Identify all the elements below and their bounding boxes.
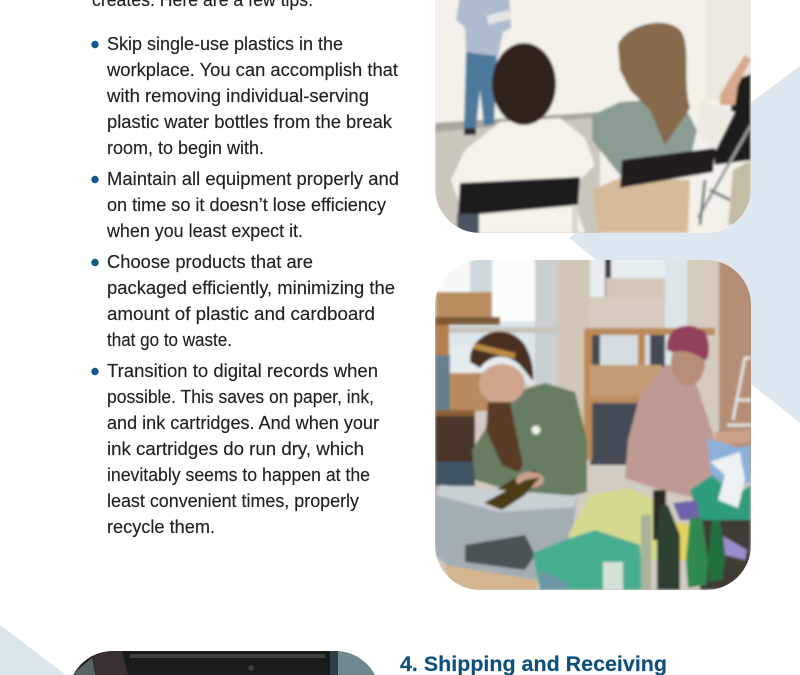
bullet item 1: room, to begin with. [107,138,264,158]
bullet item 1 [91,34,398,158]
bullet item 4: recycle them. [107,517,215,537]
bullet list [91,34,399,537]
bullet item 2: on time so it doesn’t lose efficiency [107,195,386,215]
left shelf and boxes [436,292,492,318]
ladder [727,358,751,425]
bullet item 4: and ink cartridges. And when your [107,413,379,433]
bullet item 1: workplace. You can accomplish that [106,60,398,80]
bullet item 3 [91,252,395,350]
grey shirt woman [592,98,697,175]
chair two [620,148,715,188]
bullet item 3: Choose products that are [107,252,313,272]
bullet item 1: with removing individual-serving [106,86,369,106]
photo: shipping van interior [60,651,390,675]
bottle in hand [496,470,537,493]
bullet item 4: possible. This saves on paper, ink, [107,387,374,407]
background shape: right diamond [569,66,800,423]
chair one [458,177,580,216]
bullet item 3: amount of plastic and cardboard [107,304,375,324]
bullet item 1: Skip single-use plastics in the [107,34,343,54]
bullet item 1: plastic water bottles from the break [107,112,393,132]
background shape: bottom-left triangle [0,625,66,675]
yellow and green bags [568,488,660,560]
blue and green bag with white cloth [707,438,751,490]
woman in green sweater [472,383,587,505]
plastic tub [435,487,577,582]
bullet item 3: packaged efficiently, minimizing the [107,278,395,298]
center shelf [589,297,665,329]
photo: sorting recycling [430,255,760,595]
white shirt woman [451,118,595,233]
brick pillar [558,260,588,418]
bullet item 4: least convenient times, properly [107,491,359,511]
windows [435,296,536,386]
bullet item 2: Maintain all equipment properly and [107,169,399,189]
bullet item 4 [91,361,379,537]
table [700,520,751,590]
bullet item 4: inevitably seems to happen at the [107,465,370,485]
photo: seminar audience [430,0,760,240]
bullet item 2 [91,169,399,241]
woman with pink hair [625,365,720,502]
bottles [653,490,666,540]
bullet item 4: ink cartridges do run dry, which [107,439,364,459]
bullet item 3: that go to waste. [107,330,232,350]
right seated person [712,74,751,165]
bullet item 4: Transition to digital records when [107,361,378,381]
man standing [456,0,511,56]
bullet item 2: when you least expect it. [106,221,303,241]
